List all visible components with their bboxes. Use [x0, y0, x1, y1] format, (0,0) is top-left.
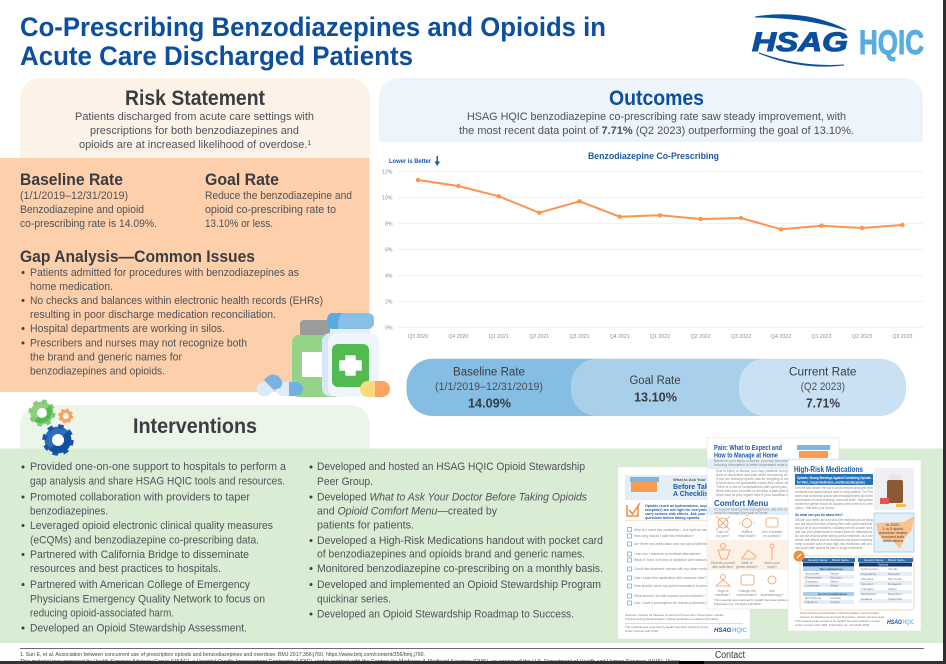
list: gap analysis issues: Patients admitted for procedures with benzodiazepines as: [30, 267, 299, 279]
document: opioid checklist: I can use / research on medical alternatives?: [634, 552, 701, 556]
list: gap analysis issues: the brand and generic names for: [30, 352, 182, 364]
list: interventions column two: of benzodiazepines and opioids brand and generic names.: [317, 548, 585, 560]
document: pain and comfort menu: Due to injury or illness, you may continue to experience a varying: [716, 469, 814, 473]
document: opioid checklist: Why do I need this medication – is it right for me?: [634, 528, 708, 532]
document: pain and comfort menu: Work with your provider to develop a pain plan that suits you.: [716, 489, 808, 493]
list: interventions column two: Monitored benzodiazepine co-prescribing on a monthly basis.: [317, 563, 603, 575]
logo: small HSAG HQIC: HSAG: [887, 620, 902, 626]
document: high-risk medications: [788, 460, 921, 631]
callout: map of the united states: [874, 513, 914, 552]
callout: map of the united states: involved both: [882, 535, 904, 539]
list: gap analysis issues: No checks and balances within electronic health records (EHRs): [30, 295, 323, 307]
icon: orange pill badge: [794, 550, 804, 562]
list: interventions column two: quickinar series.: [317, 594, 391, 606]
document: pain and comfort menu: Comfort Menu: [714, 499, 768, 508]
text: risk statement body: prescriptions for both benzodiazepines and: [90, 125, 299, 137]
icon: people with banner: [797, 445, 830, 458]
document: high-risk medications: Bring a list of your medicines, including over-the-counter ones,: [795, 526, 873, 530]
document: high-risk medications: under contract with CMS. Publication No. XS-HQIC-0000.: [795, 623, 870, 627]
document: high-risk medications: Opioids: Strong Warnings Against Combining Opioids: [797, 476, 871, 480]
pill: baseline rate: 14.09%: [468, 396, 511, 411]
document: pain and comfort menu: menu to manage your pain at home.: [714, 511, 769, 515]
document: pain and comfort menu: following information to better understand what to expect.: [714, 463, 800, 467]
table: brand and generic names: Eszopiclone: [805, 596, 822, 600]
document: opioid checklist: Food and Drug Administration. Opioid medications: patient information.: [625, 617, 719, 621]
table: brand and generic names: Vicodin: [888, 567, 898, 571]
y axis labels: 6%: [385, 247, 393, 253]
document: high-risk medications: medicines together should be avoided unless there is no other: [795, 502, 874, 506]
list: interventions column one: (eCQMs) and benzodiazepine co-prescribing data.: [30, 535, 259, 547]
data line: [416, 178, 905, 232]
text: outcomes summary: HSAG HQIC benzodiazepine co-prescribing rate saw steady improvement, with: [467, 111, 846, 123]
table: brand and generic names: Alprazolam: [805, 572, 821, 576]
list: interventions column one: benzodiazepines.: [30, 506, 108, 518]
document: pain and comfort menu: Walk or: [741, 561, 754, 565]
table: brand and generic names: Morphine: [861, 577, 874, 581]
table: brand and generic names: Ultram: [888, 587, 897, 591]
document: opioid checklist: A Checklist: [673, 491, 712, 498]
document: pain and comfort menu: To support healing and management, use this comfort: [714, 508, 795, 512]
document: opioid checklist: carry serious side effects. Ask your hospital: [645, 512, 720, 516]
logo: small HSAG HQIC: HQIC: [903, 620, 914, 626]
table: brand and generic names: Duragesic: [888, 582, 902, 586]
text: risk statement body: Patients discharged from acute care settings with: [75, 111, 314, 123]
y axis labels: 10%: [382, 195, 393, 201]
callout: map of the united states: medications: [883, 539, 903, 543]
document: opioid checklist: morphine) are not right for everyone. They: [645, 508, 718, 512]
heading: gap analysis: Gap Analysis—Common Issues: [20, 248, 255, 266]
table: brand and generic names: Generic Name: [864, 558, 884, 562]
x axis labels: Q1 2023: [812, 334, 832, 340]
table: brand and generic names: Percocet: [888, 572, 900, 576]
list: interventions column one: reducing opioid-associated harm.: [30, 608, 174, 620]
list: interventions column one: gap analysis and share HSAG HQIC tools and resources.: [30, 476, 285, 488]
document: pain and comfort menu: level of discomfort and pain when recovering at home.: [716, 473, 797, 477]
table: brand and generic names: Generic Name: [808, 558, 828, 562]
table: brand and generic names: MS Contin: [888, 577, 902, 581]
table: brand and generic names: Fentanyl: [861, 582, 873, 586]
callout: map of the united states: In 2020,: [886, 523, 900, 527]
document: pain and comfort menu: Move your: [764, 561, 781, 565]
table: brand and generic names: Klonopin: [830, 576, 842, 580]
logo: small HSAG HQIC: [714, 628, 748, 634]
list: interventions column two: patients for patients.: [317, 520, 414, 532]
document: high-risk medications: Ask about safer options for pain or cough treatments.: [795, 546, 863, 550]
document: opioid checklist: Can I have a prescription for Narcan (naloxone)?: [634, 601, 707, 605]
document: opioid checklist: Opioids (such as hydrocodone, oxycodone,: [645, 504, 720, 508]
document: pain and comfort menu: Expect does not guarantee a pain-free result. At times this can ask.: [716, 481, 817, 485]
block: goal rate: Goal Rate: [205, 171, 279, 189]
document: high-risk medications: warns that combining opioids with benzodiazepines and other: [795, 494, 874, 498]
rate summary pills: [406, 359, 906, 416]
document: pain and comfort menu: How to Manage at Home: [714, 450, 778, 460]
checklist: [628, 528, 632, 605]
document: pain and comfort menu: for pain?: [716, 534, 730, 538]
table: brand and generic names: Methadone: [861, 592, 876, 596]
document: pain and comfort menu: [707, 438, 839, 609]
chart title: Benzodiazepine Co-Prescribing: [588, 151, 719, 161]
block: baseline rate: co-prescribing rate is 14.09%.: [20, 218, 157, 230]
document: high-risk medications: and ask your pharmacist to review them for interactions.: [795, 530, 873, 534]
table: brand and generic names: Oxycodone: [861, 572, 877, 576]
logo: HSAG HQIC: HSAG: [752, 27, 848, 57]
list: interventions column two: Developed and implemented an Opioid Stewardship Program: [317, 579, 601, 591]
list: interventions column two: Developed a High-Risk Medications handout with pocket card: [317, 535, 603, 547]
pill: current rate: Current Rate: [789, 367, 856, 379]
document: opioid checklist: This material was prepared by Health Services Advisory Group: [625, 625, 709, 629]
document: opioid checklist: Can I share this medication with someone else? Why not?: [634, 576, 721, 580]
y axis labels: 12%: [382, 169, 393, 175]
panel: risk statement: [20, 78, 370, 158]
footer rule: [20, 648, 924, 649]
block: goal rate: 13.10% or less.: [205, 218, 273, 230]
list: gap analysis issues: home medication.: [30, 281, 113, 293]
icons: comfort menu options: [716, 515, 778, 586]
block: goal rate: [205, 171, 352, 230]
table: brand and generic names: Zolpidem: [805, 600, 818, 604]
list: interventions column one: Partnered with California Bridge to disseminate: [30, 549, 249, 561]
table: brand and generic names: [800, 556, 914, 610]
list: gap analysis issues: benzodiazepines and opioids.: [30, 366, 165, 378]
y axis labels: 8%: [385, 221, 393, 227]
document: pain and comfort menu: Pain: What to Expect and: [714, 443, 782, 452]
callout: map of the united states: overdose deaths: [879, 531, 907, 535]
icon: people with banner: [630, 477, 659, 492]
document: pain and comfort menu: Publication No. XS-HQIC-HD-0000.: [714, 602, 762, 606]
pill: goal rate: [571, 359, 786, 416]
list: interventions column two: Developed What to Ask Your Doctor Before Taking Opioids: [317, 492, 587, 504]
gridlines: [398, 171, 923, 327]
table: brand and generic names: Non-benzodiazepines: [818, 592, 848, 596]
heading: interventions: Interventions: [133, 415, 257, 438]
arrow: lower is better: [434, 156, 440, 166]
pill: baseline rate: (1/1/2019–12/31/2019): [435, 381, 543, 393]
document: high-risk medications: Centers for Disease Control and Prevention. Opioid overdose data.: [800, 615, 885, 619]
logo: HSAG HQIC: [752, 15, 924, 66]
callout: map of the united states: 1 in 3 opioid: [883, 527, 903, 531]
block: baseline rate: (1/1/2019–12/31/2019): [20, 190, 128, 202]
text: outcomes summary: [459, 111, 854, 137]
table: brand and generic names: Tramadol: [861, 587, 874, 591]
document: high-risk medications: So what can you do about this?: [795, 513, 843, 517]
document: high-risk medications: medicines has caused serious harm in many patients. The FDA: [795, 490, 874, 494]
table: brand and generic names: Codeine: [861, 597, 873, 601]
list: interventions column one: resources and best practices to hospitals.: [30, 563, 221, 575]
icon: orange check box: [627, 503, 640, 516]
document: pain and comfort menu: Use ice: [717, 530, 729, 534]
icon: medicine bottles and pills: [257, 313, 390, 397]
document: high-risk medications: Keep a pocket card of your high-risk medicines with you.: [795, 542, 873, 546]
document: pain and comfort menu: heat towel?: [738, 534, 756, 538]
document: pain and comfort menu: environment?: [737, 593, 757, 597]
document: high-risk medications: High-Risk Medications: [794, 465, 863, 474]
table: brand and generic names: Lorazepam: [805, 584, 821, 588]
list: interventions column one: Provided one-on-one support to hospitals to perform a: [30, 461, 287, 473]
table: brand and generic names: Brand Name: [888, 558, 905, 562]
pill: goal rate: 13.10%: [634, 390, 677, 405]
table: brand and generic names: Xanax: [830, 572, 839, 576]
y axis labels: [382, 169, 393, 331]
table: brand and generic names: Hydrocodone: [861, 567, 879, 571]
x axis labels: Q4 2020: [448, 334, 468, 340]
image: medicine bottle: [874, 468, 914, 510]
panel: interventions list background: [0, 448, 946, 643]
x axis labels: Q1 2022: [650, 334, 670, 340]
document: pain and comfort menu: Use: [769, 589, 775, 593]
document: opioid checklist: Could this treatment interact with my other medicines: [634, 567, 714, 571]
document: high-risk medications: and ask about the risks of taking them with opioid medicine.: [795, 522, 873, 526]
title: [20, 12, 606, 71]
document: opioid checklist: under contract with CMS.: [625, 629, 659, 633]
table: brand and generic names: Clonazepam: [805, 576, 822, 580]
document: opioid checklist: What should I do with unused opioid medicine?: [634, 594, 705, 598]
list: interventions column one: Promoted collaboration with providers to taper: [30, 492, 250, 504]
document: pain and comfort menu: with activities?: [712, 565, 734, 569]
list: interventions column one: [22, 461, 287, 635]
block: goal rate: opioid co-prescribing rate to: [205, 204, 336, 216]
document: pain and comfort menu: Use a blanket: [762, 530, 782, 534]
document: pain and comfort menu: Have a: [742, 530, 752, 534]
pill: current rate: 7.71%: [806, 396, 840, 411]
table: brand and generic names: Benzodiazepines: [820, 567, 843, 571]
document: high-risk medications: Talk with your health care team about the medicines you are taking: [795, 518, 873, 522]
document: opioid checklist: Are there non-medication and non-opioid alternatives: [634, 542, 714, 546]
y axis labels: 4%: [385, 273, 393, 279]
table: brand and generic names: Valium: [830, 580, 839, 584]
logo: small HSAG HQIC: [887, 620, 914, 626]
panel: baseline rate, goal rate and gap analysis: [0, 158, 370, 392]
document: pain and comfort menu: There is a risk of complications with opioid pain medication.: [716, 485, 805, 489]
list: interventions column one: Leveraged opioid electronic clinical quality measures: [30, 520, 273, 532]
document: pain and comfort menu: aromatherapy?: [761, 593, 784, 597]
document: high-risk medications: Over the past decade, the use of opioid medicine along with other: [795, 486, 874, 490]
heading: outcomes: Outcomes: [609, 87, 704, 110]
list: interventions column one: Physicians Emergency Quality Network to focus on: [30, 594, 265, 606]
document: high-risk medications: depressants can slow breathing, coma and death. Taking these: [795, 498, 873, 502]
document: high-risk medications: This material was prepared by Health Services Advisory Group: [795, 619, 880, 623]
block: baseline rate: [20, 171, 157, 230]
x axis labels: Q3 2021: [570, 334, 590, 340]
text: outcomes summary: the most recent data point of 7.71% (Q2 2023) outperforming the goal of 13.10%.: [459, 125, 854, 137]
pill: goal rate: Goal Rate: [630, 375, 680, 387]
y axis labels: 2%: [385, 299, 393, 305]
icon: gears: [30, 402, 72, 454]
document: pain and comfort menu: body?: [767, 565, 777, 569]
logo: small HSAG HQIC: HQIC: [732, 628, 748, 634]
document: pain and comfort menu: or a pillow?: [763, 534, 781, 538]
list: interventions column two: Developed an Opioid Stewardship Roadmap to Success.: [317, 609, 574, 621]
panel: interventions heading: [20, 405, 370, 449]
document: pain and comfort menu: Distract yourself: [711, 561, 735, 565]
title: Acute Care Discharged Patients: [20, 41, 413, 71]
table: brand and generic names: Tylenol #3: [888, 597, 902, 601]
document: opioid checklist: Before Taking Opioids:: [673, 484, 750, 491]
block: baseline rate: Baseline Rate: [20, 171, 123, 189]
document: pain and comfort menu: Seek care at your urgent care if your condition worsens.: [716, 493, 800, 497]
document: opioid checklist: questions before taking opioids.: [645, 516, 700, 520]
document: opioid checklist: What if I have a history of addiction with tobacco, alcohol: [634, 558, 719, 562]
document: pain and comfort menu: meditate?: [716, 593, 731, 597]
table: brand and generic names: Ativan: [830, 584, 839, 588]
table: brand and generic names: Brand Name: [832, 558, 849, 562]
list: gap analysis issues: Prescribers and nurses may not recognize both: [30, 338, 247, 350]
panel: outcomes: [379, 78, 923, 142]
x axis labels: Q4 2022: [771, 334, 791, 340]
document: pain and comfort menu: This material was prepared by Health Services Advisory Group.: [714, 598, 798, 602]
list: gap analysis issues: Hospital departments are working in silos.: [30, 323, 225, 335]
list: interventions column two: [310, 461, 603, 621]
footnote: 1. Sun E, et al. Association between concurrent use of prescription opioids and benzodiazepines and overdose. BMJ 2017;356:j760. https://www.bmj.com/content/356/bmj.j760.: [20, 652, 425, 658]
list: gap analysis issues: [22, 267, 323, 378]
x axis labels: Q4 2021: [610, 334, 630, 340]
document: opioid checklist: How should I store my opioid medication to prevent: [634, 584, 711, 588]
x axis labels: Q2 2021: [529, 334, 549, 340]
document: pain and comfort menu: Change the: [738, 589, 756, 593]
title: Co-Prescribing Benzodiazepines and Opioids in: [20, 12, 606, 42]
table: brand and generic names: Diazepam: [805, 580, 819, 584]
list: interventions column one: Developed an Opioid Stewardship Assessment.: [30, 623, 247, 635]
logo: HSAG HQIC: HQIC: [859, 24, 924, 62]
pill: baseline rate: Baseline Rate: [453, 367, 525, 379]
x axis labels: [408, 334, 912, 340]
pill: current rate: (Q2 2023): [801, 381, 845, 393]
table: brand and generic names: Lunesta: [830, 596, 841, 600]
pill: current rate: [739, 359, 906, 416]
list: interventions column two: Developed and hosted an HSAG HQIC Opioid Stewardship: [317, 461, 585, 473]
contact heading: Contact: [715, 650, 745, 661]
table: brand and generic names: Dolophine: [888, 592, 902, 596]
list: interventions column two: Peer Group.: [317, 476, 373, 488]
document: opioid checklist: [618, 467, 750, 639]
x axis labels: Q3 2020: [408, 334, 428, 340]
block: baseline rate: Benzodiazepine and opioid: [20, 204, 144, 216]
table: brand and generic names: Ambien: [830, 600, 841, 604]
y axis labels: 0%: [385, 325, 393, 331]
document: high-risk medications: for Pain, Cough Medicines, and Benzodiazepines: [797, 480, 865, 484]
document: high-risk medications: option. Talk with your doctor.: [795, 506, 835, 510]
x axis labels: Q2 2022: [691, 334, 711, 340]
line chart: benzodiazepine co-prescribing: [382, 151, 923, 340]
pill: baseline rate: [406, 359, 626, 416]
document: high-risk medications: Do not use alcohol while taking opioid medicines, as it can: [795, 534, 873, 538]
document: opioid checklist: How long should I take this medication?: [634, 534, 694, 538]
x axis labels: Q2 2023: [852, 334, 872, 340]
document: pain and comfort menu: Yoga or: [717, 589, 730, 593]
heading: risk statement: Risk Statement: [125, 87, 265, 110]
list: interventions column one: Partnered with American College of Emergency: [30, 579, 250, 591]
list: gap analysis issues: resulting in poor discharge medication reconciliation.: [30, 309, 276, 321]
x axis labels: Q1 2021: [489, 334, 509, 340]
block: goal rate: Reduce the benzodiazepine and: [205, 190, 352, 202]
document: pain and comfort menu: gently stretch?: [736, 565, 758, 569]
document: opioid checklist: What to Ask Your Doctor: [673, 477, 720, 482]
text: risk statement body: [75, 111, 314, 151]
footnote: [20, 652, 680, 664]
list: interventions column two: and Opioid Comfort Menu—created by: [317, 506, 497, 518]
logo: small HSAG HQIC: HSAG: [714, 628, 732, 634]
x axis labels: Q3 2023: [892, 334, 912, 340]
document: opioid checklist: Sources: Centers for Disease Control and Prevention. Prescription opioids.: [625, 613, 725, 617]
text: risk statement body: opioids are at increased likelihood of overdose.¹: [79, 139, 311, 151]
document: pain and comfort menu: Based on your injury or illness, you may feel some pain. Review the: [714, 459, 816, 463]
document: high-risk medications: worsen side effects such as drowsiness and slowed breathing.: [795, 538, 873, 542]
label: lower is better: Lower is Better: [389, 158, 431, 165]
document: high-risk medications: Food and Drug Administration. FDA Drug Safety Communication.: [800, 611, 880, 615]
document: pain and comfort menu: If you are actively injured, ask for stopping or medication.: [716, 477, 802, 481]
table: brand and generic names: Opioids: [878, 562, 889, 566]
x axis labels: Q3 2022: [731, 334, 751, 340]
